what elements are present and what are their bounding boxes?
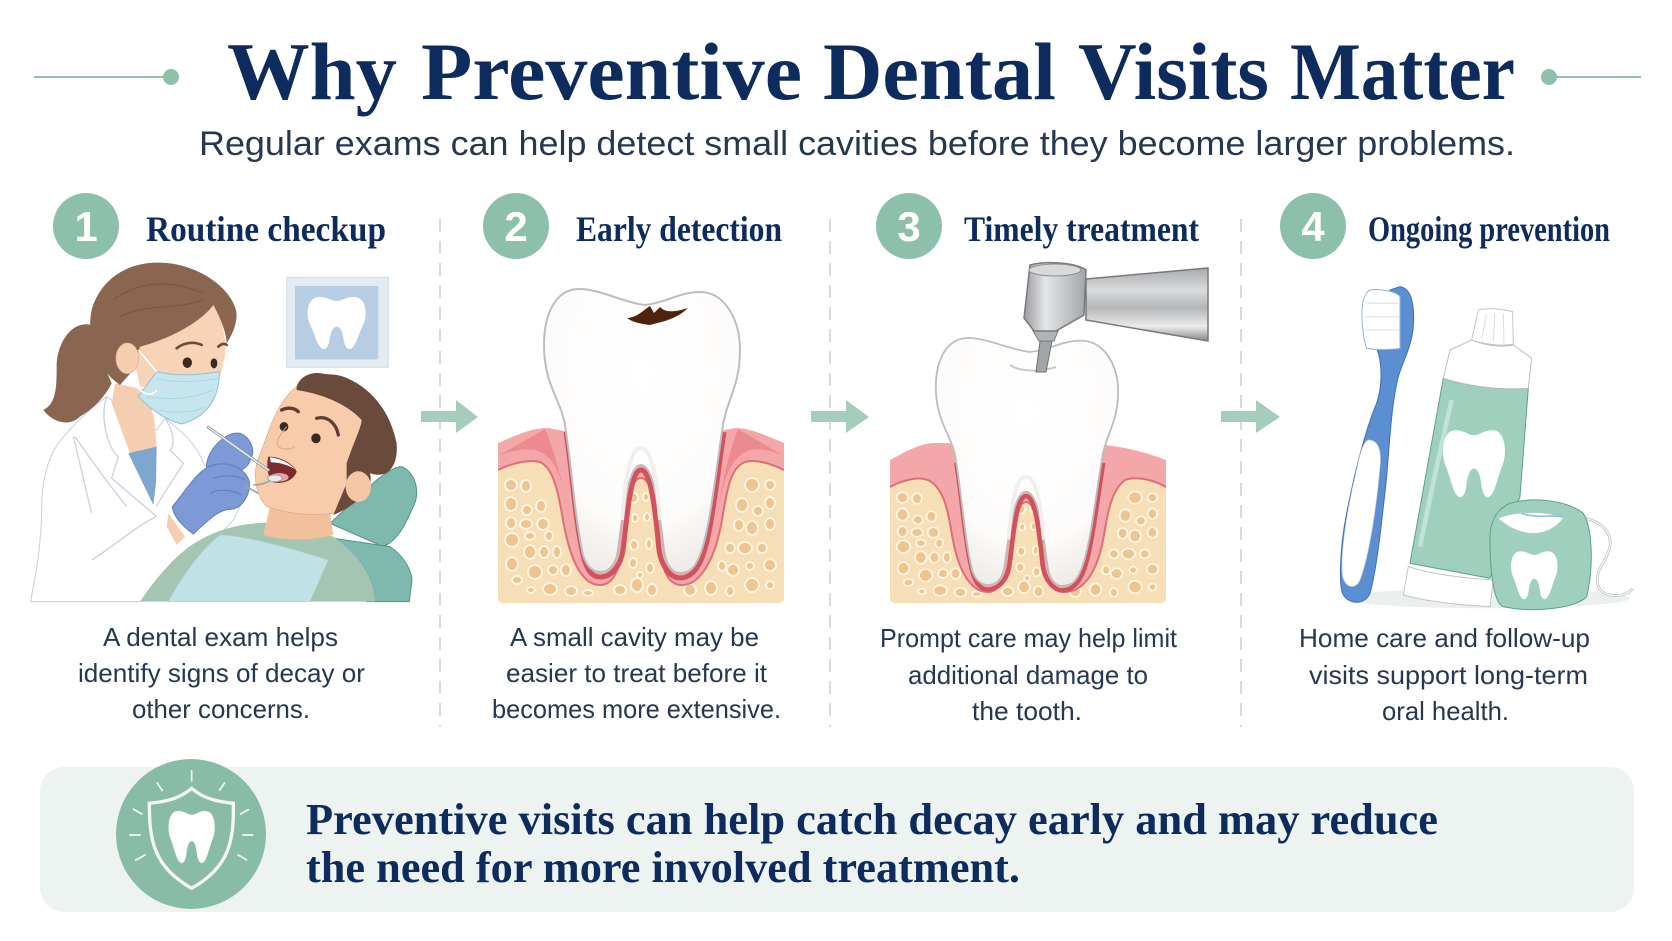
header decoration left	[34, 69, 179, 85]
title: Preventive	[421, 26, 802, 117]
step dividers	[440, 219, 1241, 727]
step 2 badge: 2	[504, 203, 528, 250]
caption step 1: A dental exam helps	[103, 622, 338, 652]
step 3 badge	[876, 193, 942, 259]
illustration: tooth with small cavity	[498, 289, 784, 603]
subtitle: Regular exams can help detect small cavities before they become larger problems.	[199, 125, 1515, 163]
callout text	[306, 795, 1438, 892]
caption step 4: oral health.	[1382, 696, 1509, 726]
cavity	[627, 306, 688, 325]
header decoration right	[1541, 69, 1641, 85]
illustration: toothbrush, toothpaste and floss	[1340, 287, 1633, 610]
callout text: Preventive visits can help catch decay early and may reduce	[306, 795, 1438, 844]
arrow 2	[811, 400, 869, 433]
caption step 2: A small cavity may be	[510, 622, 759, 652]
icon: shield with tooth	[116, 759, 266, 909]
arrow 3	[1221, 400, 1280, 433]
caption step 4: visits support long-term	[1309, 660, 1588, 690]
caption step 3	[880, 623, 1178, 726]
step 4 badge: 4	[1301, 203, 1325, 250]
title: Why	[227, 26, 397, 117]
caption step 2: becomes more extensive.	[492, 694, 781, 724]
callout text: the need for more involved treatment.	[306, 843, 1020, 892]
step 2 badge	[483, 193, 549, 259]
caption step 2: easier to treat before it	[506, 658, 768, 688]
illustration: tooth treatment with handpiece	[890, 263, 1208, 603]
callout banner	[40, 759, 1634, 912]
caption step 3: additional damage to	[908, 660, 1148, 690]
caption step 1: other concerns.	[132, 694, 310, 724]
step 1 badge: 1	[74, 203, 98, 250]
step 2 heading: Early detection	[576, 209, 782, 249]
step 1 badge	[53, 193, 119, 259]
title: Matter	[1290, 26, 1515, 117]
caption step 1	[78, 622, 365, 724]
caption step 4: Home care and follow-up	[1299, 623, 1590, 653]
step 4 heading: Ongoing prevention	[1368, 209, 1610, 249]
step 4 badge	[1280, 193, 1346, 259]
caption step 4	[1299, 623, 1590, 726]
step 1 heading: Routine checkup	[146, 209, 386, 249]
step 3 badge: 3	[897, 203, 921, 250]
caption step 3: Prompt care may help limit	[880, 623, 1178, 653]
title: Dental	[823, 26, 1056, 117]
caption step 2	[492, 622, 781, 724]
title	[227, 26, 1515, 117]
illustration: dentist examining patient	[31, 263, 417, 602]
arrow 1	[421, 400, 478, 433]
caption step 1: identify signs of decay or	[78, 658, 365, 688]
caption step 3: the tooth.	[972, 696, 1082, 726]
title: Visits	[1078, 26, 1269, 117]
step 3 heading: Timely treatment	[964, 209, 1199, 249]
